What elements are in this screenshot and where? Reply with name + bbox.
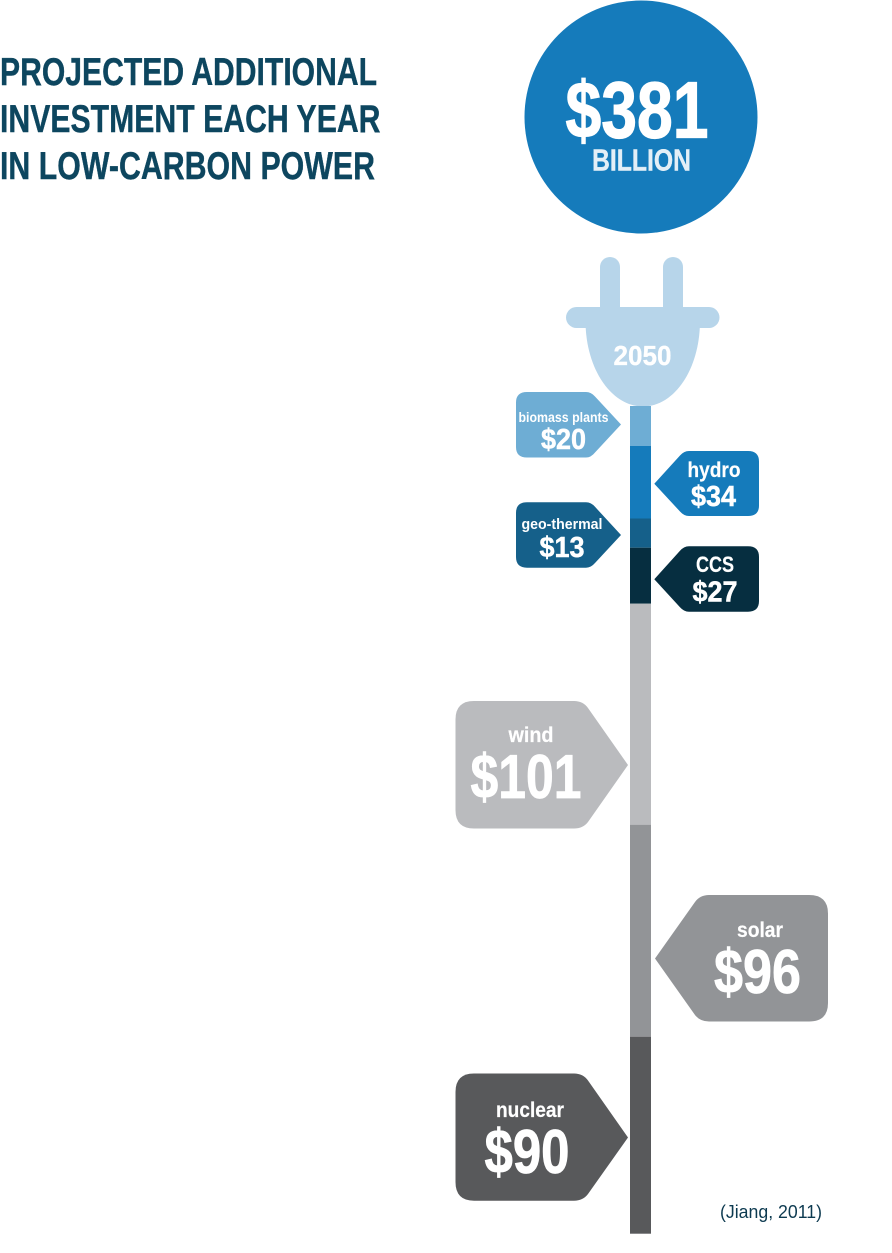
- icon: plug with 2050: [566, 257, 720, 406]
- label: wind: $101: [470, 743, 582, 812]
- label: wind: wind: [508, 724, 554, 747]
- label: nuclear: [456, 1074, 628, 1201]
- label: geo-thermal: geo-thermal: [522, 516, 602, 533]
- title: IN LOW-CARBON POWER: [0, 145, 375, 188]
- total circle: $381 billion: BILLION: [592, 142, 691, 178]
- label: biomass plants: biomass plants: [518, 409, 609, 425]
- label: nuclear: nuclear: [496, 1099, 564, 1122]
- label: geo-thermal: [516, 502, 621, 568]
- label: biomass plants: [516, 392, 621, 458]
- label: solar: solar: [737, 919, 783, 942]
- total circle: $381 billion: [524, 0, 758, 234]
- title: [0, 51, 380, 188]
- label: biomass plants: $20: [541, 424, 586, 456]
- title: INVESTMENT EACH YEAR: [0, 98, 380, 141]
- icon: plug with 2050: 2050: [614, 340, 672, 371]
- label: hydro: [654, 451, 759, 516]
- label: CCS: [654, 546, 759, 612]
- label: CCS: CCS: [696, 552, 734, 577]
- label: nuclear: $90: [484, 1118, 570, 1187]
- label: geo-thermal: $13: [540, 532, 584, 564]
- title: PROJECTED ADDITIONAL: [0, 51, 377, 94]
- label: CCS: $27: [692, 576, 738, 608]
- label: hydro: hydro: [688, 459, 740, 482]
- label: solar: [655, 895, 828, 1022]
- source citation: (Jiang, 2011): [720, 1202, 822, 1222]
- stacked cord bar: [630, 406, 651, 1234]
- label: solar: $96: [714, 938, 801, 1007]
- total circle: $381 billion: $381: [566, 66, 708, 154]
- label: hydro: $34: [691, 481, 736, 513]
- label: wind: [456, 701, 628, 828]
